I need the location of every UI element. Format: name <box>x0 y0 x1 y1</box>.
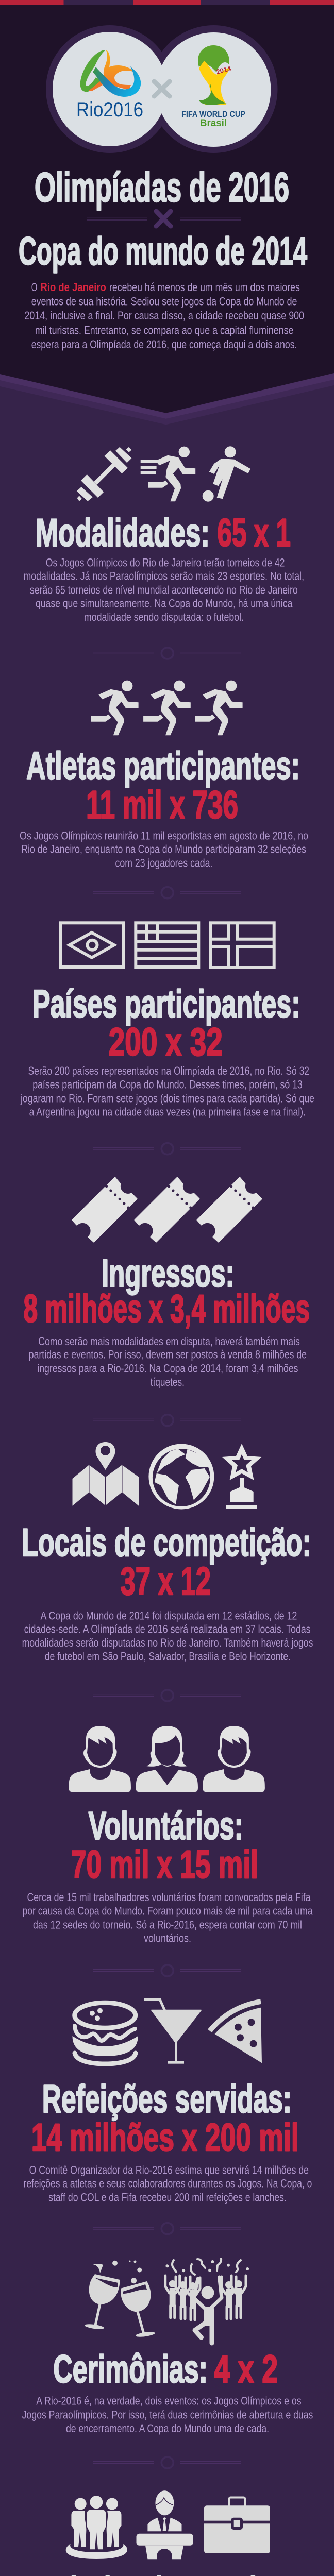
panel: paises <box>20 923 314 1118</box>
panel: refeicoes <box>24 1999 312 2204</box>
text block <box>22 2395 313 2435</box>
text block <box>24 556 304 623</box>
icon: versus X <box>154 81 170 96</box>
icon: tickets <box>73 1178 261 1242</box>
panel: atletas <box>20 681 308 870</box>
panel: voluntarios <box>22 1726 313 1944</box>
intro text <box>25 281 304 351</box>
title <box>19 164 307 273</box>
icon: flags <box>61 923 274 968</box>
background: top dark panel with chevron <box>0 0 334 425</box>
heading <box>22 1521 311 1603</box>
heading: 37 x 12 <box>121 1560 211 1603</box>
icon: three runners <box>91 681 243 735</box>
icon: sprinter <box>141 447 195 501</box>
heading <box>32 982 300 1064</box>
panel: ingressos <box>24 1178 310 1388</box>
icon: FIFA World Cup logo <box>181 45 245 129</box>
heading <box>26 744 300 827</box>
icon: wine glasses <box>85 2261 155 2338</box>
icon: party crowd <box>165 2259 249 2344</box>
heading: Ingressos: <box>102 1252 234 1296</box>
icon: cocktail <box>144 1999 201 2064</box>
text block: modalidade sendo disputada: o futebol. <box>84 611 244 623</box>
icon: group of people <box>66 2496 127 2559</box>
heading: 70 mil x 15 mil <box>71 1843 258 1887</box>
panel: modalidades <box>24 446 304 623</box>
heading: 11 mil x 736 <box>86 783 238 827</box>
icon: pizza slice <box>210 2002 262 2063</box>
heading <box>31 2077 299 2160</box>
text block: voluntários. <box>144 1931 191 1944</box>
heading: Voluntários: <box>89 1804 243 1848</box>
icon: globe <box>148 1444 214 1510</box>
text block <box>20 1064 314 1118</box>
icon: burger <box>72 2003 138 2064</box>
icon: man at podium <box>136 2490 193 2559</box>
icon: Rio 2016 logo: Rio2016 <box>76 98 143 121</box>
icon: star trophy <box>222 1444 261 1509</box>
heading <box>24 1252 310 1331</box>
heading <box>71 1804 258 1887</box>
heading: Cerimônias: <box>53 2347 208 2391</box>
text block: tíquetes. <box>151 1376 185 1388</box>
icon: FIFA World Cup logo: Brasil <box>200 118 227 129</box>
text block <box>29 1335 307 1388</box>
top colour bar <box>0 0 334 5</box>
icon: map with pin <box>72 1442 139 1506</box>
text block <box>24 2163 312 2204</box>
icon: dumbbell <box>77 447 131 501</box>
intro text: O <box>31 281 37 294</box>
heading: 4 x 2 <box>214 2347 278 2391</box>
icon: Rio 2016 logo <box>76 50 143 121</box>
text block <box>22 1891 313 1944</box>
panel: cerimonias <box>22 2259 313 2435</box>
icon: FIFA World Cup logo: 2014 <box>215 64 232 76</box>
heading: 200 x 32 <box>109 1020 223 1064</box>
text block <box>20 829 308 870</box>
heading: 65 x 1 <box>218 511 291 555</box>
icon: footballer <box>203 446 250 502</box>
logos badge <box>46 25 277 153</box>
text block: com 23 jogadores cada. <box>115 857 212 870</box>
icon: FIFA World Cup logo: FIFA WORLD CUP <box>181 109 245 119</box>
icon: briefcase <box>204 2498 270 2553</box>
heading: Modalidades: <box>36 511 210 555</box>
panel: chefes de estado <box>25 2490 313 2576</box>
text block: de encerramento. A Copa do Mundo uma de cada. <box>66 2422 269 2435</box>
icon: volunteers <box>69 1726 265 1792</box>
panel: locais <box>22 1442 313 1663</box>
text block <box>22 1609 313 1663</box>
intro text: Rio de Janeiro <box>40 281 106 294</box>
